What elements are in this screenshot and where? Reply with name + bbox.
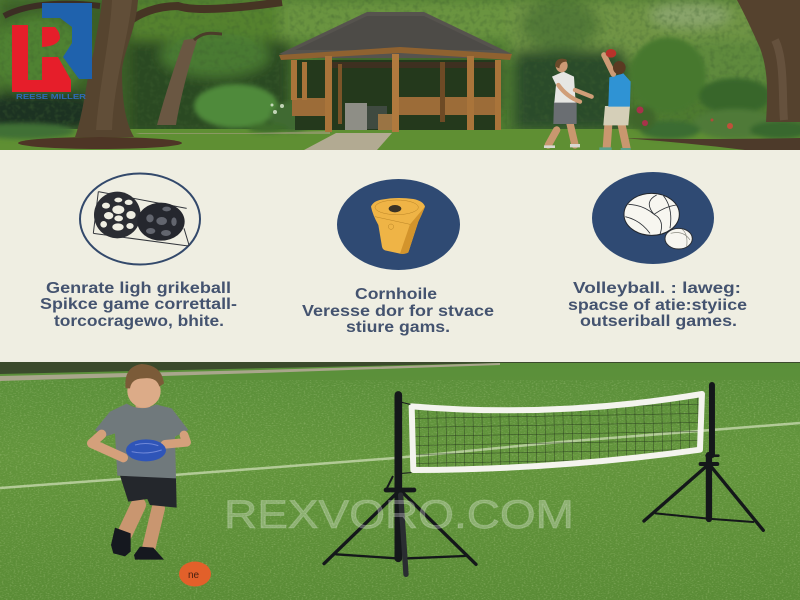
caption 2: stiure gams. <box>346 319 450 336</box>
caption 3: spacse of atie:styiice <box>568 297 747 314</box>
white blossoms <box>270 104 284 114</box>
flowers <box>636 106 733 129</box>
logo <box>12 3 92 101</box>
caption 1: Spikce game correttall- <box>40 296 237 313</box>
foliage background <box>0 0 770 135</box>
caption 1: torcocragewo, bhite. <box>54 313 224 330</box>
icon: cornhole board on navy circle <box>337 179 460 270</box>
left oak tree <box>4 0 282 137</box>
left tripod <box>324 395 476 574</box>
white field line <box>0 423 800 488</box>
icon: volleyballs on navy circle <box>592 172 714 264</box>
caption 2: Cornhoile <box>355 286 437 303</box>
right tree <box>737 0 800 122</box>
orange ball: ne <box>188 570 200 581</box>
grass texture <box>0 380 800 600</box>
caption 1: Genrate ligh grikeball <box>46 280 231 297</box>
net with tripod stands <box>324 385 763 574</box>
bottom photo: lawn with net <box>0 362 800 600</box>
caption 3: Volleyball. : laweg: <box>573 280 741 297</box>
caption 2: Veresse dor for stvace <box>302 303 494 320</box>
watermark: REXVORO.COM <box>224 493 574 537</box>
middle panel: cream background <box>0 150 800 362</box>
lawn <box>0 129 800 150</box>
stone path <box>304 133 392 150</box>
person in white shirt <box>544 59 592 148</box>
feature column 3: volleyball <box>568 172 747 330</box>
caption 3 <box>568 280 747 330</box>
shrubs <box>0 37 800 139</box>
feature column 1: net ball game <box>40 174 237 330</box>
background hedge and path <box>0 362 800 381</box>
boy with ball <box>92 364 188 560</box>
net mesh <box>414 398 698 467</box>
caption 2 <box>302 286 494 336</box>
caption 1 <box>40 280 237 330</box>
mulch beds <box>18 137 182 149</box>
gazebo <box>279 12 512 132</box>
top photo: park with gazebo <box>0 0 800 150</box>
net white frame <box>412 394 702 470</box>
logo: REESE MILLER <box>16 92 87 101</box>
feature column 2: cornhole <box>302 179 494 336</box>
person in blue shirt with red ball <box>599 49 631 150</box>
right tripod <box>644 385 763 530</box>
grass field <box>0 362 800 600</box>
caption 3: outseriball games. <box>580 313 737 330</box>
second tree <box>157 33 222 125</box>
orange ball <box>179 562 211 586</box>
foliage texture <box>0 0 800 130</box>
icon: spike balls in ring <box>80 174 200 264</box>
